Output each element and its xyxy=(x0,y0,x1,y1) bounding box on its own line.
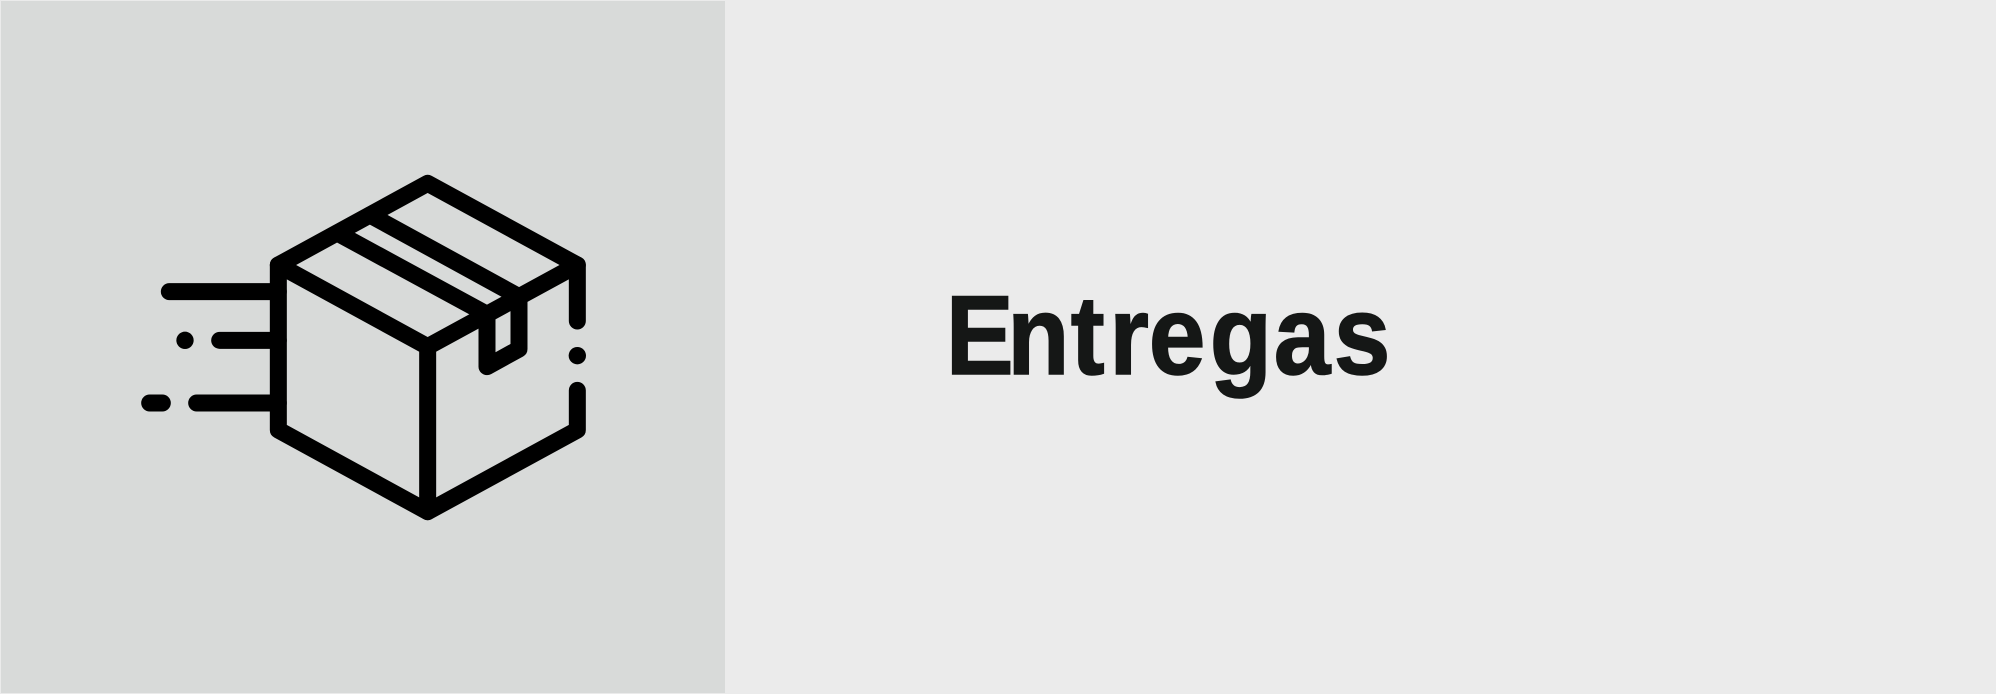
title: Entregas xyxy=(946,273,1390,398)
box lid front edges xyxy=(278,265,577,512)
speed lines xyxy=(150,292,278,403)
icon: delivery box with speed lines xyxy=(150,183,586,512)
packing tape xyxy=(337,215,519,367)
panel: icon background xyxy=(1,1,725,693)
panel: title background xyxy=(725,1,1995,693)
dots xyxy=(176,332,586,364)
box outline xyxy=(278,183,577,512)
